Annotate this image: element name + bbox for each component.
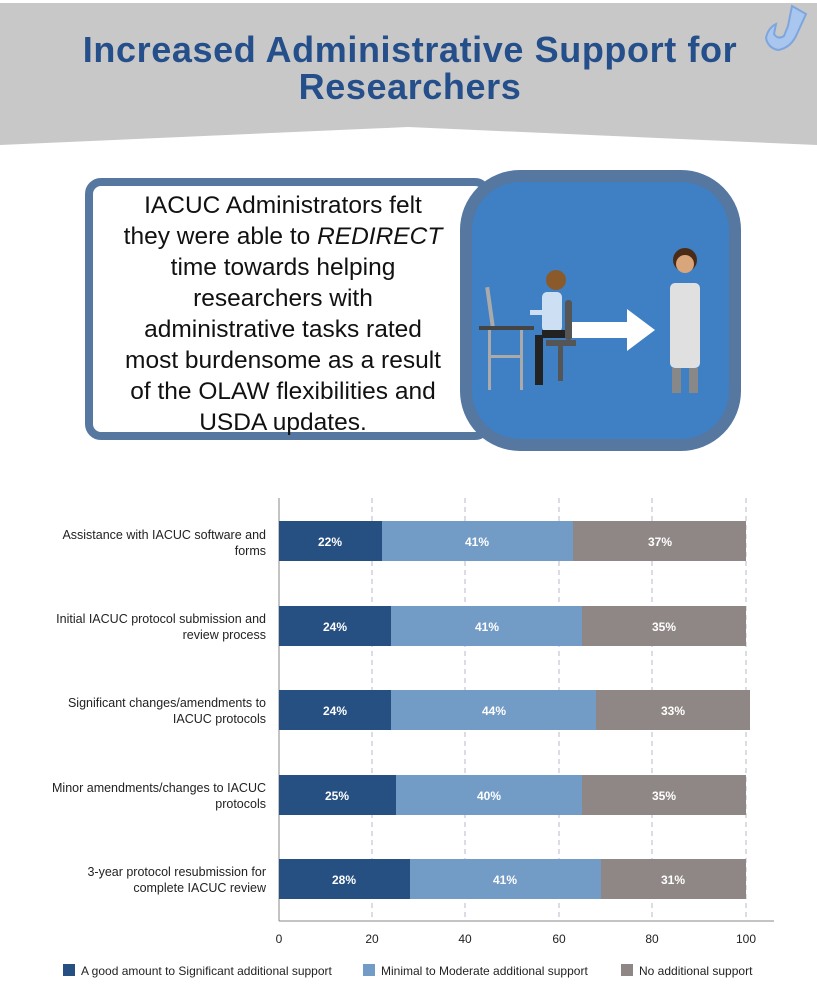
bar chart: 41%	[493, 873, 517, 887]
callout text: most burdensome as a result	[125, 347, 441, 374]
title: Increased Administrative Support for	[83, 29, 737, 70]
bar chart: 25%	[325, 789, 349, 803]
illustration: researcher to scientist	[479, 248, 700, 393]
bar chart: review process	[183, 628, 266, 642]
bar chart: 100	[736, 932, 756, 946]
icon: wrench	[765, 4, 808, 51]
callout text	[124, 192, 444, 436]
bar chart: 41%	[465, 535, 489, 549]
bar chart: 35%	[652, 620, 676, 634]
text panel	[85, 178, 491, 440]
bar chart: Minor amendments/changes to IACUC	[52, 781, 266, 795]
bar chart: Significant changes/amendments to	[68, 696, 266, 710]
callout text: time towards helping	[171, 254, 395, 281]
bar chart: IACUC protocols	[173, 712, 266, 726]
callout text: IACUC Administrators felt	[144, 192, 422, 219]
bar chart: 41%	[475, 620, 499, 634]
bar chart: 33%	[661, 704, 685, 718]
callout text: they were able to REDIRECT	[124, 223, 442, 250]
legend: Minimal to Moderate additional support	[381, 964, 588, 978]
bar chart: 80	[645, 932, 659, 946]
bar chart: complete IACUC review	[133, 881, 267, 895]
header band	[0, 3, 817, 145]
bar chart: 24%	[323, 704, 347, 718]
legend	[63, 964, 753, 978]
bar chart: 20	[365, 932, 379, 946]
bar chart: 44%	[482, 704, 506, 718]
bar chart: 40%	[477, 789, 501, 803]
callout text: administrative tasks rated	[144, 316, 422, 343]
bar chart: 0	[276, 932, 283, 946]
bar chart: Assistance with IACUC software and	[62, 528, 266, 542]
bar chart: 3-year protocol resubmission for	[87, 865, 266, 879]
callout text: of the OLAW flexibilities and	[130, 378, 436, 405]
title: Researchers	[299, 66, 521, 107]
bar chart: forms	[235, 544, 266, 558]
bar chart: 37%	[648, 535, 672, 549]
bar chart	[52, 498, 774, 978]
callout text: researchers with	[193, 285, 373, 312]
bar chart: protocols	[215, 797, 266, 811]
bar chart: 60	[552, 932, 566, 946]
bar chart: 40	[458, 932, 472, 946]
bar chart: 35%	[652, 789, 676, 803]
bar chart: 28%	[332, 873, 356, 887]
legend: No additional support	[639, 964, 753, 978]
bar chart: Initial IACUC protocol submission and	[56, 612, 266, 626]
bar chart: 24%	[323, 620, 347, 634]
illustration panel	[460, 170, 741, 451]
bar chart: 22%	[318, 535, 342, 549]
legend: A good amount to Significant additional support	[81, 964, 333, 978]
title	[83, 29, 737, 107]
bar chart: 31%	[661, 873, 685, 887]
callout text: USDA updates.	[199, 409, 367, 436]
